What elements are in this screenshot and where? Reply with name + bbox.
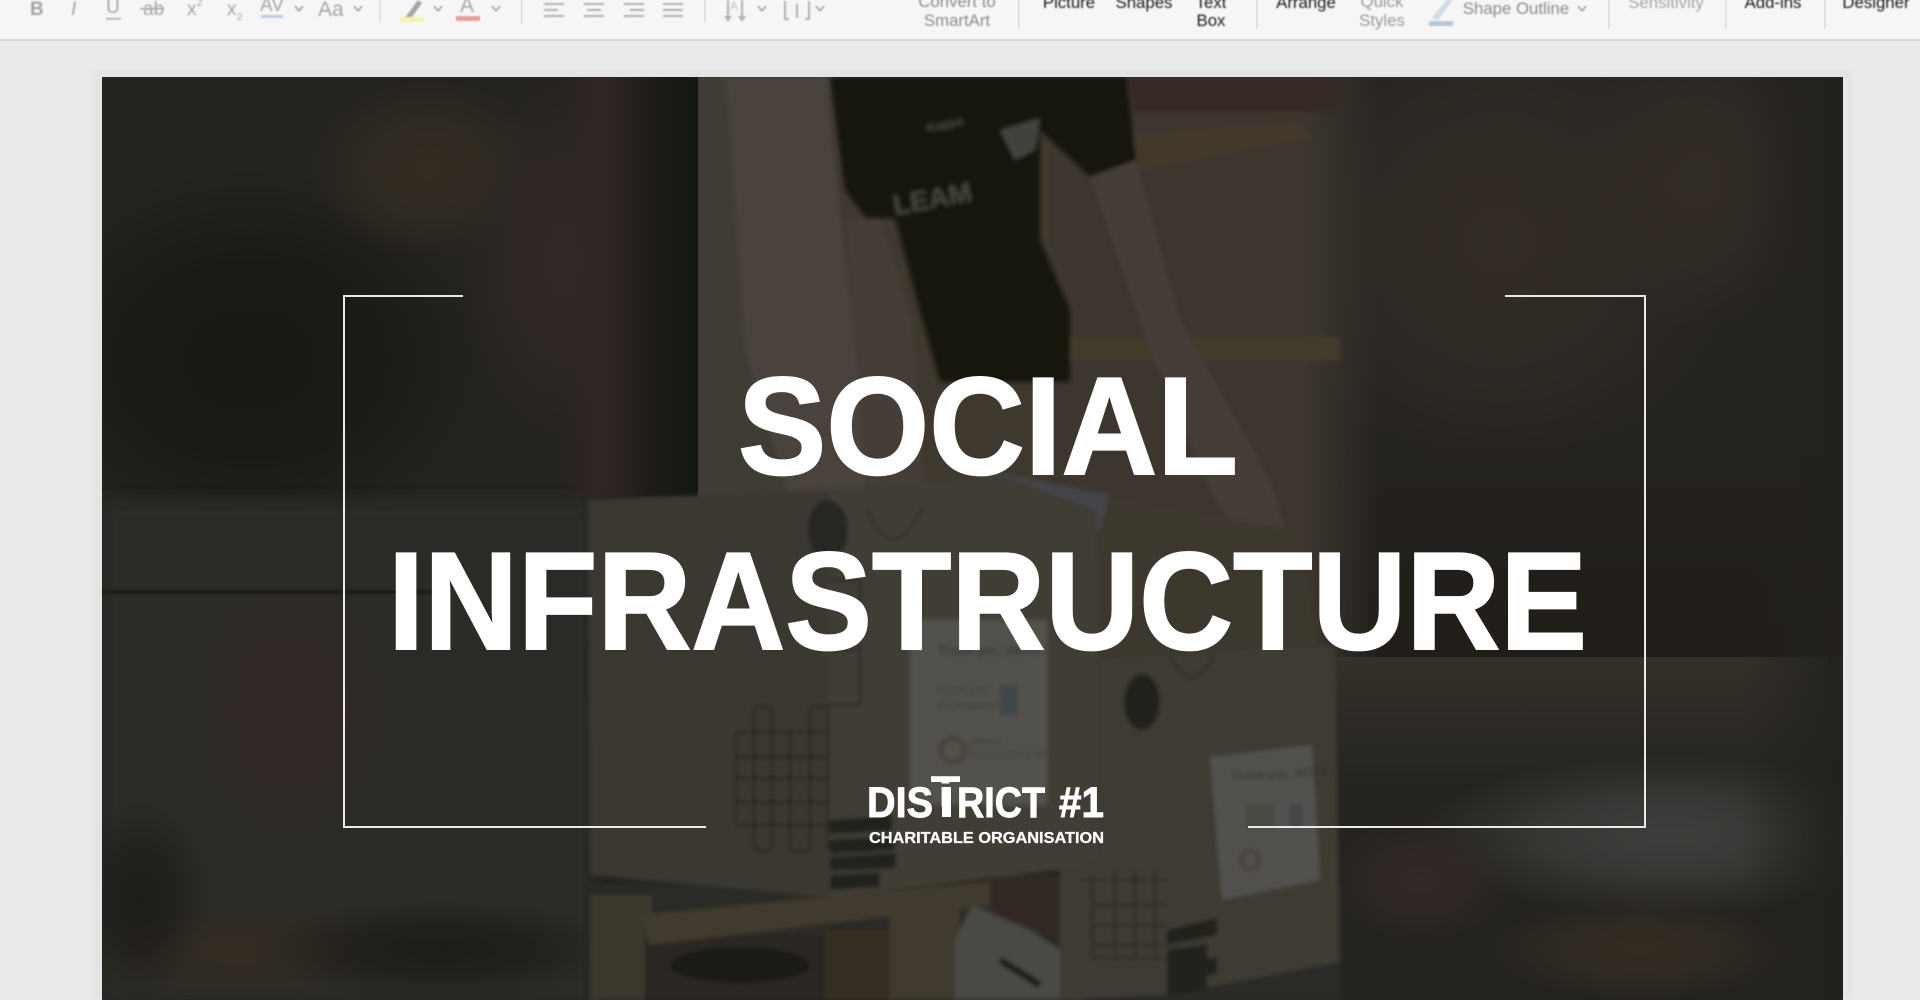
ribbon labels: Styles [1359,11,1405,30]
blurred photo surroundings [102,92,1796,990]
grid pattern [736,580,860,850]
person right arm [1090,160,1285,545]
logo wordmark: #1 [1059,779,1104,827]
frame right bracket [1248,296,1645,827]
text formatting controls [30,0,480,23]
ribbon toolbar [0,0,1920,41]
shirt print: LEAM [891,177,974,221]
title line 1: SOCIAL [738,349,1238,504]
left side tones [102,243,398,478]
photo: wall behind person [560,77,1380,660]
label on left carton: GERMANY [938,699,999,713]
right carton [1060,645,1340,1000]
shirt print [891,114,974,221]
logo: District #1 [867,768,1104,847]
left carton [588,475,1098,897]
person shirt and shorts [830,77,1136,382]
label on left carton [910,620,1053,805]
logo wordmark: RICT [957,779,1045,827]
decorative bracket frame [344,296,1645,827]
alignment and spacing controls [544,0,810,22]
logo wordmark: DIS [867,779,933,827]
logo subtitle: CHARITABLE ORGANISATION [869,830,1104,847]
label on left carton: Thank you, WOH! [938,643,1041,658]
photo: carton boxes [588,470,1340,1000]
dropdown chevrons [295,6,1586,11]
ribbon labels: Box [1197,11,1226,30]
carton under title right [1100,522,1280,660]
handle slits [830,815,896,890]
ribbon labels [918,0,1910,30]
logo wordmark: T [931,768,960,816]
ribbon separators [379,0,1826,29]
ribbon labels: SmartArt [924,11,990,30]
wooden pallet [590,875,1340,1000]
title line 2: INFRASTRUCTURE [388,524,1587,679]
text formatting controls: 2 [237,12,243,23]
label on left carton: Aktion [970,736,1001,748]
frame left bracket [344,296,706,827]
right carton: Thank you, WOH! [1231,764,1327,783]
shirt print: Kappa [926,114,965,135]
logo wordmark [867,768,1104,827]
icon: shape outline [1429,0,1453,26]
person left arms [726,77,872,500]
label on left carton: ISRA AID [938,684,988,698]
right side tones [1372,104,1628,376]
label on left carton: Deutschland Hilft [970,749,1053,761]
wood strips on wall [1132,134,1142,165]
title [388,349,1587,679]
plastic bag [954,905,1062,1000]
